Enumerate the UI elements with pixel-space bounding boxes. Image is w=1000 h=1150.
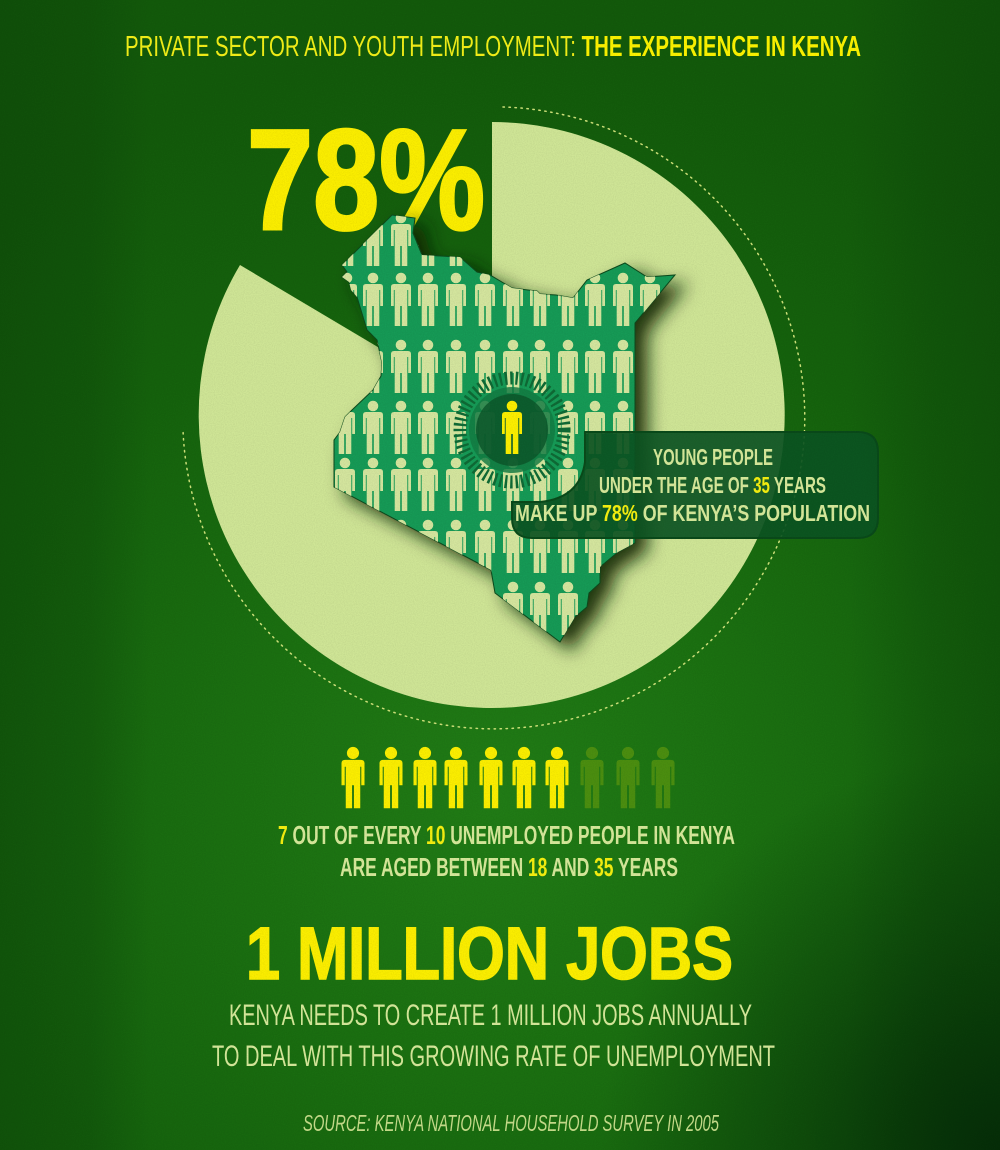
- statistic text: 7 out of 10: [278, 820, 735, 882]
- callout: young people: [512, 432, 878, 538]
- spotlight target around highlighted person: [460, 378, 564, 482]
- callout text line 2: UNDER THE AGE OF 35 YEARS: [599, 472, 826, 498]
- headline: 1 million jobs: 1 MILLION JOBS: [246, 912, 733, 995]
- title: PRIVATE SECTOR AND YOUTH EMPLOYMENT: THE EXPERIENCE IN KENYA: [125, 31, 861, 63]
- callout text line 1: YOUNG PEOPLE: [653, 444, 773, 470]
- source note: SOURCE: KENYA NATIONAL HOUSEHOLD SURVEY IN 2005: [303, 1110, 719, 1136]
- statistic text: 7 out of 10: 7 OUT OF EVERY 10 UNEMPLOYED PEOPLE IN KENYA: [278, 820, 735, 850]
- pie chart: 78 percent: [199, 122, 785, 708]
- body text: jobs needed: [212, 999, 775, 1073]
- icon: highlighted yellow person: [502, 401, 522, 454]
- map of Kenya filled with people: [334, 213, 675, 642]
- pictogram: 7 of 10 people: [342, 747, 674, 808]
- dotted ring around pie chart: [183, 107, 805, 729]
- callout text line 3: MAKE UP 78% OF KENYA’S POPULATION: [515, 500, 870, 526]
- big figure 78%: 78%: [247, 101, 485, 260]
- statistic text: 7 out of 10: ARE AGED BETWEEN 18 AND 35 YEARS: [340, 852, 678, 882]
- body text: jobs needed: KENYA NEEDS TO CREATE 1 MILLION JOBS ANNUALLY: [229, 999, 752, 1032]
